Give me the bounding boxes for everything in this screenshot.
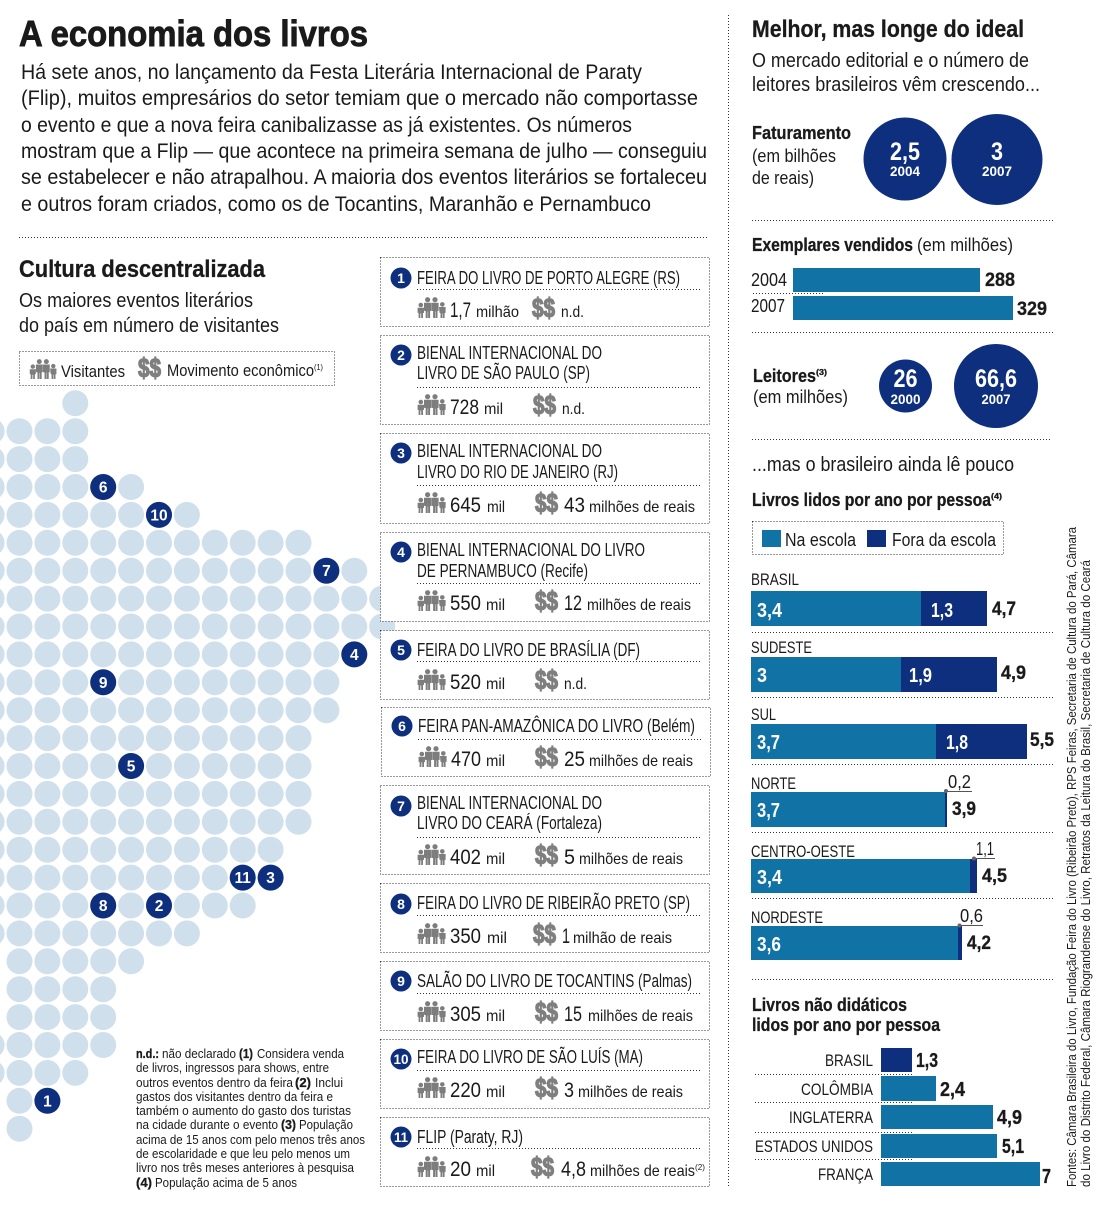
panel: event 6: milhões de reais <box>589 753 693 770</box>
stacked bar: Brasil <box>751 570 1016 626</box>
map markers: 2 <box>155 898 163 915</box>
panel: event 2: 2 <box>397 347 405 363</box>
intro text block: (Flip), muitos empresários do setor temiam que o mercado não comportasse <box>21 87 698 110</box>
subheading: Os maiores eventos literários <box>19 290 253 312</box>
panel: event 9: 15 <box>564 1003 582 1026</box>
panel: event 7: milhões de reais <box>579 851 683 868</box>
panel: event 2: n.d. <box>562 401 585 418</box>
bar chart: livros não didáticos: ESTADOS UNIDOS <box>755 1137 873 1156</box>
stacked bar: Brasil: 4,7 <box>992 599 1016 620</box>
faturamento: label and bubbles: (em bilhões <box>752 146 836 166</box>
panel: event 8: milhão de reais <box>573 930 672 947</box>
panel: event 6: 6 <box>398 718 406 734</box>
map markers <box>34 474 367 1114</box>
bar chart: livros não didáticos: INGLATERRA <box>789 1108 874 1127</box>
panel: event 7: mil <box>486 851 505 868</box>
stacked bar: Norte: NORTE <box>751 774 796 793</box>
panel: event 9: mil <box>486 1008 505 1025</box>
panel: event 5 <box>380 630 710 700</box>
panel: event 3: BIENAL INTERNACIONAL DO <box>417 441 602 461</box>
stacked bar: Sul: 5,5 <box>1030 730 1054 751</box>
footnotes: n.d.: <box>136 1046 159 1061</box>
panel: event 2: mil <box>484 401 503 418</box>
panel: event 5: n.d. <box>564 676 587 693</box>
stacked bar: Nordeste: 4,2 <box>967 933 991 954</box>
panel: event 6: $$ <box>535 742 558 772</box>
panel: event 3: mil <box>487 499 505 516</box>
map markers: 6 <box>99 480 108 496</box>
intro text block: mostram que a Flip — que acontece na primeira semana de julho — conseguiu <box>21 140 707 163</box>
panel: event 2: LIVRO DE SÃO PAULO (SP) <box>417 362 590 383</box>
panel: event 7: 5 <box>564 846 575 869</box>
subheading: mercado editorial: O mercado editorial e o número de <box>752 50 1029 72</box>
faturamento: label and bubbles: de reais) <box>752 168 814 188</box>
footnotes: (2) <box>295 1075 311 1090</box>
heading: livros não didáticos: Livros não didáticos <box>752 995 907 1015</box>
panel: event 5: mil <box>486 676 505 693</box>
faturamento: label and bubbles <box>752 114 1042 205</box>
panel: event 9: milhões de reais <box>588 1008 693 1025</box>
footnotes <box>136 1046 365 1190</box>
panel: event 1: 1,7 <box>450 299 471 322</box>
map markers: 5 <box>127 758 136 776</box>
footnotes: livro nos três meses anteriores à pesquisa <box>136 1160 355 1175</box>
footnotes: (1) <box>239 1046 253 1061</box>
panel: event 10: milhões de reais <box>578 1084 683 1101</box>
panel: event 5: FEIRA DO LIVRO DE BRASÍLIA (DF) <box>417 640 640 660</box>
panel: event 9 <box>380 962 710 1030</box>
legend: visitantes and movimento econômico <box>20 352 334 386</box>
stacked bar: Centro-Oeste: 1,1 <box>976 839 994 859</box>
panel: event 10: mil <box>486 1084 505 1101</box>
panel: event 7: 7 <box>397 798 405 814</box>
panel: event 10: $$ <box>535 1073 558 1103</box>
leitores: label and bubbles: 2007 <box>982 391 1011 407</box>
panel: event 7: BIENAL INTERNACIONAL DO <box>417 793 602 813</box>
intro text block: e outros foram criados, como os de Tocantins, Maranhão e Pernambuco <box>21 193 651 216</box>
panel: event 11: 20 <box>450 1158 471 1181</box>
panel: event 1 <box>380 258 710 326</box>
sources, vertical text: do Livro do Distrito Federal, Câmara Riograndense do Livro, Retratos da Leitura do Brasil, Secretaria de Cultura do Ceará <box>1078 559 1093 1187</box>
panel: event 6: mil <box>486 753 505 770</box>
heading: Cultura descentralizada: Cultura descentralizada <box>19 256 266 283</box>
stacked bar: Sul: 3,7 <box>757 732 780 754</box>
bar chart: livros não didáticos: 7 <box>1042 1166 1051 1188</box>
stacked bar: Centro-Oeste: CENTRO-OESTE <box>751 842 855 861</box>
panel: event 3: 645 <box>450 494 481 517</box>
faturamento: label and bubbles: 2007 <box>982 163 1012 179</box>
bar chart: livros não didáticos: 4,9 <box>997 1107 1022 1129</box>
stacked bar: Norte: 3,9 <box>952 799 976 820</box>
heading: livros lidos por ano por pessoa: (4) <box>991 492 1002 501</box>
intro text block: Há sete anos, no lançamento da Festa Literária Internacional de Paraty <box>21 61 642 84</box>
leitores: label and bubbles: Leitores <box>753 366 816 386</box>
panel: event 11: 11 <box>394 1129 408 1145</box>
faturamento: label and bubbles: 2,5 <box>890 138 920 166</box>
panel: event 4: $$ <box>535 586 558 616</box>
stacked bar: Nordeste: NORDESTE <box>751 908 823 927</box>
heading: livros não didáticos <box>752 995 941 1035</box>
panel: event 7 <box>380 786 710 874</box>
panel: event 10: 3 <box>564 1079 574 1102</box>
panel: event 11: $$ <box>531 1152 554 1182</box>
panel: event 8: 8 <box>397 896 405 912</box>
panel: event 1: 1 <box>397 270 405 286</box>
panel: event 8: 1 <box>562 925 570 948</box>
panel: event 7: $$ <box>535 840 558 870</box>
panel: event 2: BIENAL INTERNACIONAL DO <box>417 343 602 363</box>
panel: event 10 <box>380 1040 710 1108</box>
stacked bar: Sudeste: SUDESTE <box>751 638 812 657</box>
footnotes: de livros, ingressos para shows, entre <box>136 1060 329 1075</box>
stacked bar: Sudeste: 4,9 <box>1001 663 1026 684</box>
bar chart: livros não didáticos: 1,3 <box>916 1050 938 1072</box>
panel: event 5: $$ <box>535 665 558 695</box>
leitores: label and bubbles: (em milhões) <box>753 387 848 407</box>
panel: event 4: 550 <box>450 592 481 615</box>
bar chart: livros não didáticos <box>755 1048 1051 1188</box>
exemplares vendidos: bar chart: Exemplares vendidos <box>752 235 913 255</box>
stacked bar: Norte: 3,7 <box>757 800 780 822</box>
stacked bar: Brasil: 3,4 <box>757 600 783 622</box>
title: A economia dos livros <box>19 13 368 54</box>
heading: livros não didáticos: lidos por ano por pessoa <box>752 1015 941 1035</box>
panel: event 6 <box>382 708 710 776</box>
panel: event 4: 4 <box>397 544 405 560</box>
subheading: mercado editorial <box>752 50 1040 96</box>
bar chart: livros não didáticos: FRANÇA <box>818 1165 874 1184</box>
stacked bar: Sudeste <box>751 638 1026 692</box>
bar chart: livros não didáticos: 5,1 <box>1002 1136 1024 1158</box>
footnotes: Inclui <box>315 1075 343 1090</box>
faturamento: label and bubbles: 2004 <box>890 163 920 179</box>
footnotes: acima de 15 anos com pelo menos três anos <box>136 1132 365 1147</box>
map markers: 3 <box>266 870 275 887</box>
exemplares vendidos: bar chart: (em milhões) <box>917 235 1013 255</box>
panel: event 3: 3 <box>397 445 405 461</box>
legend: visitantes and movimento econômico: Visitantes <box>61 363 125 381</box>
panel: event 3: LIVRO DO RIO DE JANEIRO (RJ) <box>417 462 618 482</box>
leitores: label and bubbles: (3) <box>816 368 827 377</box>
footnotes: População acima de 5 anos <box>155 1175 297 1190</box>
subheading: mas o brasileiro ainda lê pouco: ...mas o brasileiro ainda lê pouco <box>752 454 1014 476</box>
bar chart: livros não didáticos: 2,4 <box>940 1079 966 1101</box>
map markers: 8 <box>99 898 108 915</box>
stacked bar: Sudeste: 3 <box>757 665 767 687</box>
map markers: 4 <box>350 647 359 664</box>
panel: event 11: FLIP (Paraty, RJ) <box>417 1127 523 1147</box>
map markers: 10 <box>150 507 168 524</box>
panel: event 4: milhões de reais <box>587 597 691 614</box>
panel: event 9: $$ <box>535 997 558 1027</box>
panel: event 1: FEIRA DO LIVRO DE PORTO ALEGRE (RS) <box>417 268 680 288</box>
subheading: do país em número de visitantes <box>19 315 279 337</box>
footnotes: na cidade durante o evento <box>136 1117 278 1132</box>
panel: event 2: $$ <box>533 390 556 420</box>
panel: event 2: 728 <box>450 396 479 419</box>
legend: visitantes and movimento econômico: (1) <box>314 363 323 372</box>
leitores: label and bubbles: 2000 <box>890 391 921 407</box>
sources, vertical text: Fontes: Câmara Brasileira do Livro, Fundação Feira do Livro (Ribeirão Preto), RPS Feiras, Secretaria de Cultura do Pará, Câmara <box>1064 526 1079 1187</box>
stacked bar: Sul: 1,8 <box>946 732 968 754</box>
panel: event 5: 520 <box>450 671 481 694</box>
stacked bar: Centro-Oeste: 4,5 <box>982 866 1007 887</box>
panel: event 11 <box>380 1118 710 1186</box>
stacked bar: Norte <box>751 772 976 827</box>
panel: event 8 <box>380 884 710 952</box>
exemplares vendidos: bar chart: 288 <box>985 270 1015 291</box>
map markers: 11 <box>235 870 251 887</box>
legend: na escola / fora da escola: Na escola <box>785 530 857 550</box>
panel: event 6: 25 <box>564 748 585 771</box>
stacked bar: Centro-Oeste: 3,4 <box>757 867 783 889</box>
bar chart: livros não didáticos: BRASIL <box>825 1051 873 1070</box>
panel: event 11: 4,8 <box>561 1158 586 1181</box>
map markers: 9 <box>99 675 108 692</box>
faturamento: label and bubbles: 3 <box>991 138 1003 166</box>
panel: event 4: mil <box>486 597 505 614</box>
legend: na escola / fora da escola: Fora da escola <box>892 530 997 550</box>
footnotes: gastos dos visitantes dentro da feira e <box>136 1089 333 1104</box>
heading: Melhor, mas longe do ideal: Melhor, mas longe do ideal <box>752 16 1024 43</box>
panel: event 1: n.d. <box>561 304 584 321</box>
footnotes: (3) <box>281 1117 296 1132</box>
leitores: label and bubbles <box>753 344 1038 428</box>
subheading: mercado editorial: leitores brasileiros vêm crescendo... <box>752 74 1040 96</box>
bar chart: livros não didáticos: COLÔMBIA <box>801 1080 874 1099</box>
stacked bar: Norte: 0,2 <box>948 772 971 792</box>
panel: event 5: 5 <box>397 642 405 658</box>
intro text block: o evento e que a nova feira canibalizasse as já existentes. Os números <box>21 114 632 137</box>
footnotes: (4) <box>136 1175 152 1190</box>
panel: event 9: 305 <box>450 1003 481 1026</box>
stacked bar: Sul <box>751 705 1054 759</box>
panel: event 3: milhões de reais <box>589 499 695 516</box>
footnotes: Considera venda <box>257 1046 345 1061</box>
exemplares vendidos: bar chart: 2007 <box>751 296 785 316</box>
panel: event 8: 350 <box>450 925 481 948</box>
panel: event 3: 43 <box>564 494 585 517</box>
faturamento: label and bubbles: Faturamento <box>752 123 851 143</box>
panel: event 6: 470 <box>451 748 481 771</box>
leitores: label and bubbles: 26 <box>894 365 918 393</box>
stacked bar: Sul: SUL <box>751 705 776 724</box>
stacked bar: Nordeste <box>751 906 991 960</box>
panel: event 9: SALÃO DO LIVRO DE TOCANTINS (Palmas) <box>417 970 692 991</box>
panel: event 1: $$ <box>532 293 555 323</box>
stacked bar: Brasil: 1,3 <box>931 600 953 622</box>
panel: event 8: FEIRA DO LIVRO DE RIBEIRÃO PRETO (SP) <box>417 892 690 913</box>
panel: event 3 <box>380 434 710 524</box>
panel: event 1: milhão <box>476 304 519 321</box>
panel: event 4: 12 <box>564 592 582 615</box>
panel: event 3: $$ <box>535 488 558 518</box>
panel: event 10: 10 <box>394 1051 409 1067</box>
panel: event 10: FEIRA DO LIVRO DE SÃO LUÍS (MA) <box>417 1046 643 1067</box>
intro text block <box>21 61 707 216</box>
exemplares vendidos: bar chart <box>751 235 1047 320</box>
panel: event 4: DE PERNAMBUCO (Recife) <box>417 561 588 581</box>
panel: event 6: FEIRA PAN-AMAZÔNICA DO LIVRO (Belém) <box>418 715 695 736</box>
panel: event 11: mil <box>476 1163 495 1180</box>
panel: event 2 <box>380 336 710 424</box>
panel: event 4: BIENAL INTERNACIONAL DO LIVRO <box>417 540 645 560</box>
footnotes: também o aumento do gasto dos turistas <box>136 1103 351 1118</box>
panel: event 7: 402 <box>450 846 481 869</box>
panel: event 11: (2) <box>695 1163 705 1172</box>
dot map of Brazil <box>0 403 383 1129</box>
panel: event 4 <box>380 532 710 622</box>
panel: event 7: LIVRO DO CEARÁ (Fortaleza) <box>417 813 602 833</box>
leitores: label and bubbles: 66,6 <box>975 365 1017 393</box>
legend: visitantes and movimento econômico: Movimento econômico <box>167 362 314 380</box>
footnotes: outros eventos dentro da feira <box>136 1075 294 1090</box>
subheading <box>19 290 279 337</box>
map markers: 7 <box>322 563 331 580</box>
stacked bar: Sudeste: 1,9 <box>909 665 932 687</box>
panel: event 8: mil <box>487 930 507 947</box>
stacked bar: Nordeste: 3,6 <box>757 934 781 956</box>
heading: livros lidos por ano por pessoa: Livros lidos por ano por pessoa <box>752 490 992 510</box>
map markers: 1 <box>43 1093 52 1110</box>
legend: na escola / fora da escola <box>752 522 1004 554</box>
stacked bar: Centro-Oeste <box>751 839 1007 893</box>
footnotes: População <box>299 1117 353 1132</box>
panel: event 10: 220 <box>450 1079 481 1102</box>
legend: visitantes and movimento econômico: $$ <box>138 353 161 383</box>
stacked bar: Nordeste: 0,6 <box>960 906 983 926</box>
exemplares vendidos: bar chart: 2004 <box>751 270 787 290</box>
exemplares vendidos: bar chart: 329 <box>1017 299 1047 320</box>
panel: event 9: 9 <box>397 973 405 989</box>
footnotes: de escolaridade e que leu pelo menos um <box>136 1146 350 1161</box>
panel: event 11: milhões de reais <box>590 1163 695 1180</box>
panel: event 8: $$ <box>533 919 556 949</box>
intro text block: se estabelecer e não atrapalhou. A maioria dos eventos literários se fortaleceu <box>21 166 707 189</box>
stacked bar: Brasil: BRASIL <box>751 570 799 589</box>
sources, vertical text <box>1064 526 1093 1187</box>
footnotes: não declarado <box>162 1046 236 1061</box>
